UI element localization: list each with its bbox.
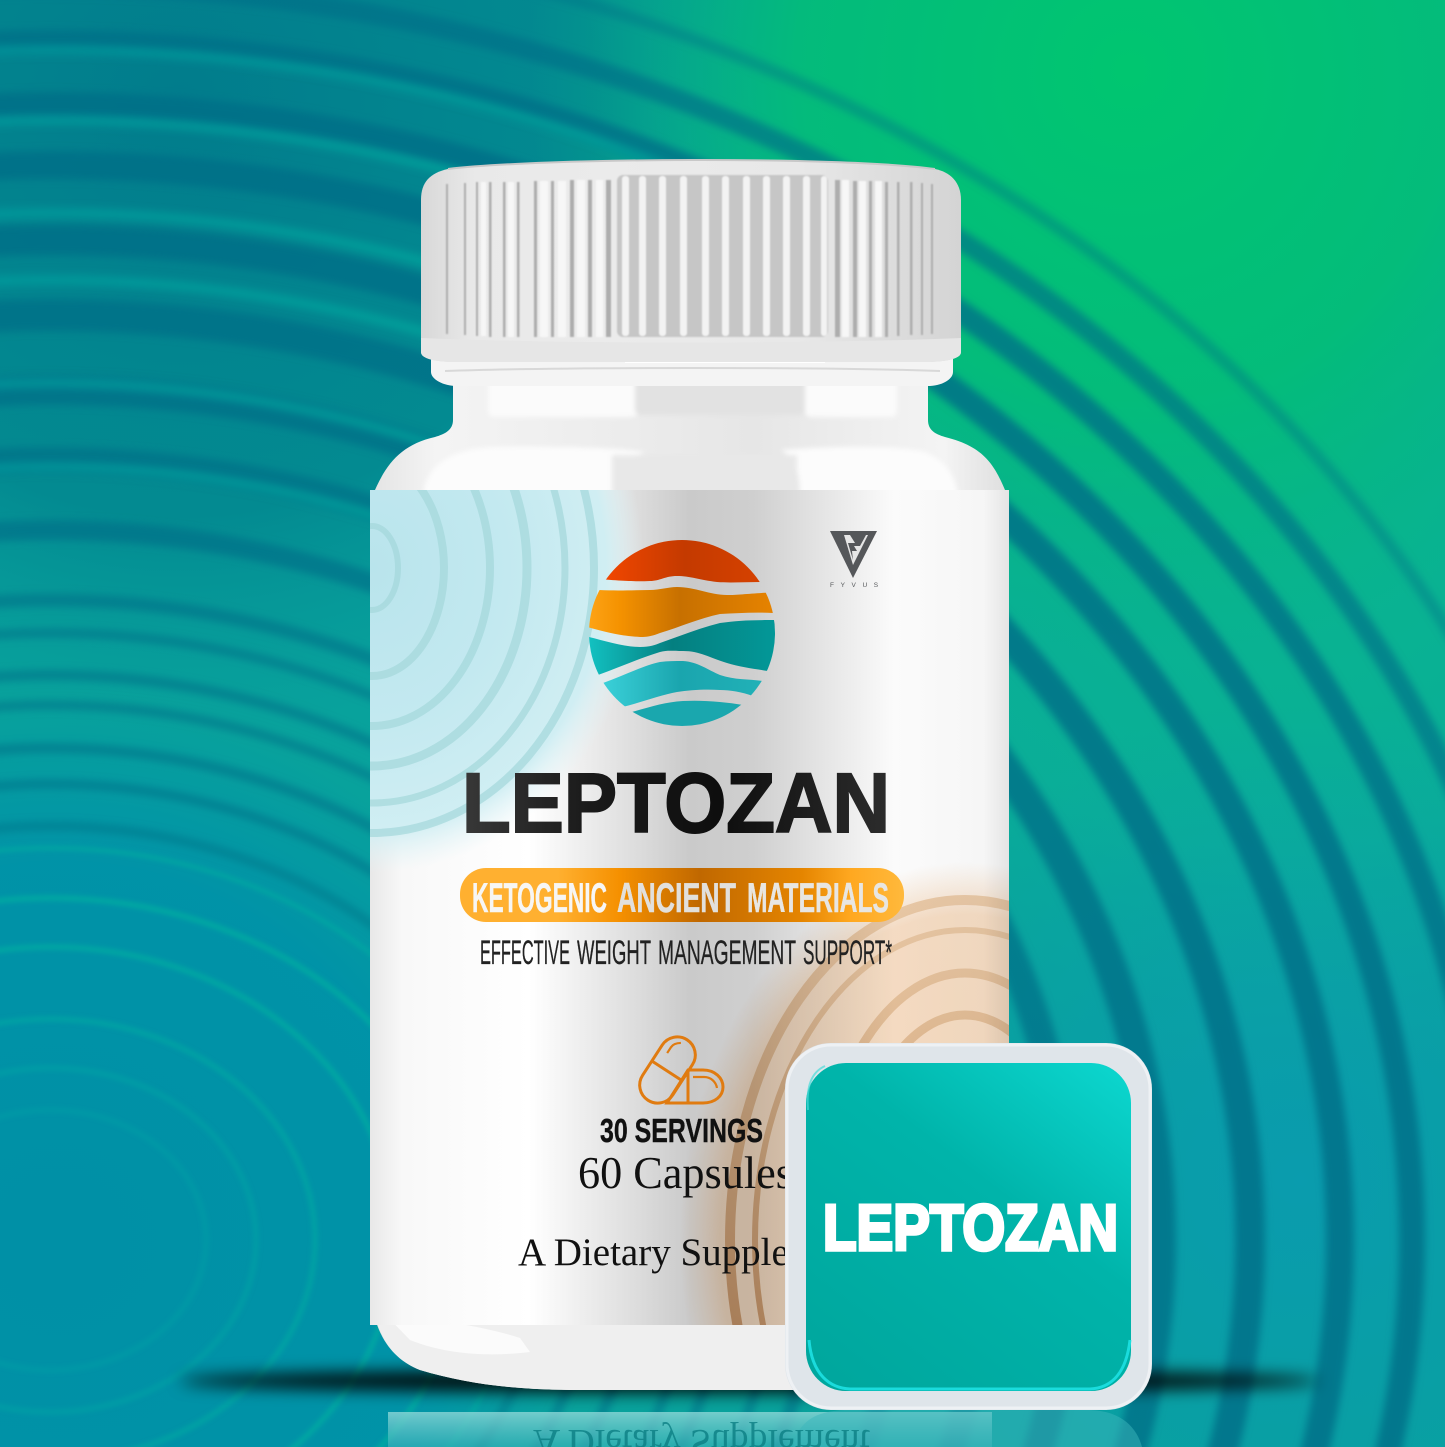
capsule count: 60 Capsules xyxy=(578,1147,793,1198)
blue swirl xyxy=(370,490,630,858)
brand mark: FYVUS xyxy=(830,582,885,589)
brand name: LEPTOZAN xyxy=(462,756,890,850)
subhead: WEIGHT xyxy=(577,934,651,972)
subhead: EFFECTIVE xyxy=(480,934,570,972)
brand mark xyxy=(830,531,885,589)
bottle base xyxy=(372,1300,1008,1390)
bottle reflection xyxy=(388,1410,1142,1447)
neck ring xyxy=(431,357,953,386)
product type: A Dietary Supplement xyxy=(518,1231,867,1274)
badge wordmark: LEPTOZAN xyxy=(823,1191,1118,1264)
label xyxy=(370,490,1009,1325)
servings: 30 SERVINGS xyxy=(600,1112,763,1149)
cap ribs xyxy=(446,175,933,337)
tagline pill: MATERIALS xyxy=(747,874,889,921)
neck and shoulder highlights xyxy=(424,373,958,495)
tagline pill xyxy=(460,868,904,922)
bottle body xyxy=(372,380,1008,1390)
logo: sun over waves xyxy=(589,540,775,726)
tile badge xyxy=(785,1043,1152,1410)
bottle xyxy=(370,159,1009,1390)
bottle cap xyxy=(421,160,961,362)
subhead: SUPPORT* xyxy=(803,934,892,972)
peach swirl xyxy=(688,870,1009,1325)
subhead xyxy=(480,934,892,972)
icon: capsules xyxy=(633,1030,723,1110)
subhead: MANAGEMENT xyxy=(658,934,796,972)
tagline pill: ANCIENT xyxy=(617,874,736,921)
floor shadow xyxy=(180,1369,1320,1393)
tagline pill: KETOGENIC xyxy=(472,874,607,921)
